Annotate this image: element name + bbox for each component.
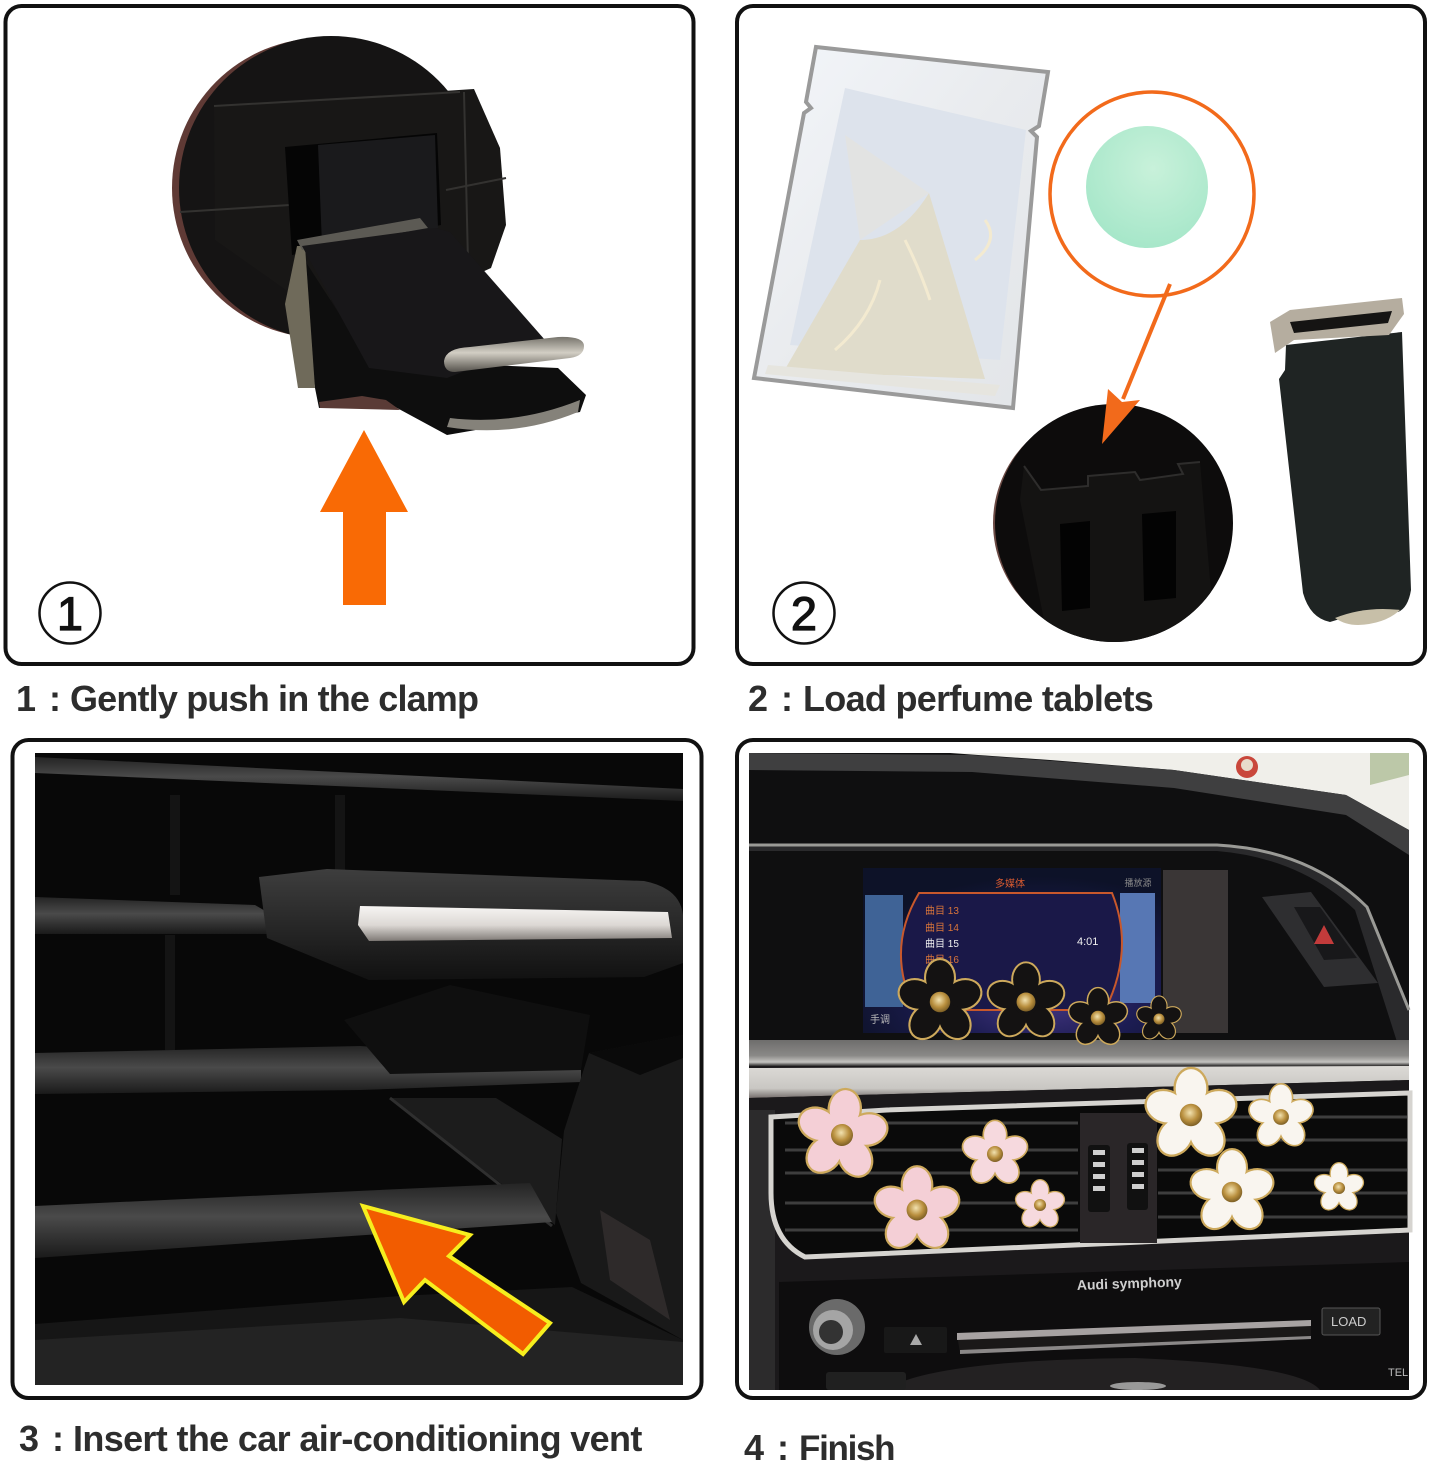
panel 3: insert vent (12, 740, 702, 1398)
photo: vent close-up (35, 753, 683, 1385)
icon: clip back (993, 404, 1233, 650)
pink flowers (790, 1085, 1066, 1253)
photo: car dashboard (749, 753, 1410, 1390)
screen: 曲目 16 (925, 954, 959, 966)
caption 3: 3 (19, 1418, 39, 1459)
hazard button (1262, 892, 1378, 987)
black flowers (896, 960, 1183, 1048)
badge: 2 (774, 582, 834, 644)
screen: 曲目 15 (925, 938, 959, 950)
radio unit: LOAD (1331, 1314, 1366, 1329)
radio unit (809, 1299, 1408, 1390)
screen: 曲目 13 (925, 905, 959, 917)
badge: 1 (40, 582, 100, 644)
radio unit: TEL (1388, 1367, 1408, 1379)
screen: 曲目 14 (925, 922, 959, 934)
caption 3: : (52, 1418, 64, 1459)
dash recess pillar (1163, 870, 1228, 1033)
icon: perfume sachet (754, 47, 1048, 408)
panel 2: load tablets (737, 6, 1425, 664)
arrow: to vent (363, 1206, 550, 1354)
icon: clamp (285, 218, 586, 435)
caption 1: : (49, 678, 61, 719)
arrow: up (320, 430, 408, 605)
caption 1: 1 (16, 678, 36, 719)
icon: clamp piece (1270, 298, 1411, 625)
caption 2: 2 (748, 678, 768, 719)
screen: 播放源 (1124, 877, 1152, 888)
screen (863, 868, 1161, 1033)
badge: 2: 2 (791, 587, 817, 640)
white flowers (1143, 1069, 1365, 1234)
radio label: Audi symphony (1077, 1273, 1182, 1293)
screen: 手调 (870, 1013, 890, 1026)
screen: 多媒体 (995, 877, 1025, 890)
arrow: tablet to clip (1102, 284, 1170, 444)
caption 2: : (781, 678, 793, 719)
badge: 1: 1 (57, 587, 83, 640)
vents (771, 1093, 1410, 1257)
caption 1: Gently push in the clamp (70, 678, 478, 719)
icon: round clip back (172, 36, 506, 340)
panel 4: finished (737, 740, 1425, 1398)
panel 1: push clamp (6, 6, 694, 664)
radio panel (779, 1262, 1409, 1390)
caption 2: Load perfume tablets (803, 678, 1153, 719)
icon: green tablet in orange circle (1050, 92, 1254, 296)
caption 3: Insert the car air-conditioning vent (73, 1418, 642, 1459)
screen: 4:01 (1077, 936, 1098, 948)
